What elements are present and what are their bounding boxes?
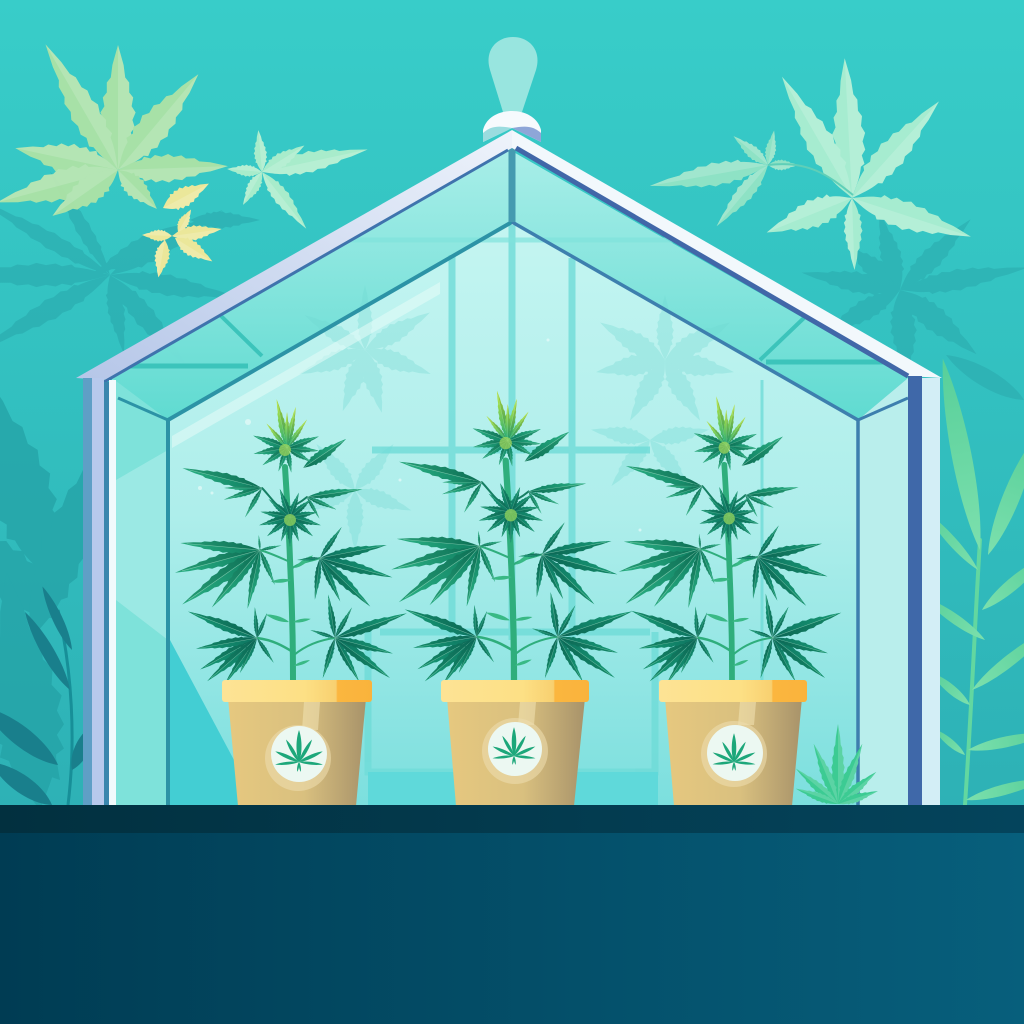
dark silhouette foliage right xyxy=(800,210,1024,408)
greenhouse xyxy=(76,37,942,805)
plant 1 xyxy=(173,398,409,686)
left lower foliage xyxy=(0,361,128,815)
roof right beam xyxy=(512,130,942,378)
pot 1 xyxy=(222,680,372,806)
roof inner line right xyxy=(516,148,908,376)
roof and frame lines xyxy=(110,148,908,805)
yellow small leaves xyxy=(142,174,223,279)
pot 3 xyxy=(659,680,807,806)
glass floor reflection xyxy=(170,640,258,805)
pale leaf top right xyxy=(761,57,975,270)
pot 2 xyxy=(441,680,589,806)
dark silhouette foliage left xyxy=(0,167,260,374)
roof dome xyxy=(483,111,541,142)
side wall glass left xyxy=(112,378,168,805)
back window frames xyxy=(368,225,762,805)
ghost plants behind glass xyxy=(296,285,736,550)
back wall teal strip xyxy=(368,772,658,805)
floor panel xyxy=(0,833,1024,1024)
sparkles xyxy=(198,338,642,532)
roof inner line left xyxy=(104,150,508,382)
front glass xyxy=(170,222,858,805)
small seedling xyxy=(793,724,879,808)
roof back beam xyxy=(345,238,690,242)
pale leaf top centre left xyxy=(227,130,370,234)
glass highlight xyxy=(172,282,440,448)
right post xyxy=(908,376,940,805)
pale leaf top left xyxy=(0,37,228,228)
roof glass xyxy=(110,150,908,420)
floor ledge xyxy=(0,805,1024,833)
plant 3 xyxy=(617,395,843,686)
side wall reflection xyxy=(116,450,168,640)
right grass plant xyxy=(921,357,1024,805)
roof left beam xyxy=(76,130,512,380)
pale leaf upper right small xyxy=(648,130,853,232)
plant 2 xyxy=(390,390,634,686)
side wall glass right xyxy=(858,378,908,805)
left post xyxy=(83,378,116,805)
roof vent bulb xyxy=(489,37,537,112)
